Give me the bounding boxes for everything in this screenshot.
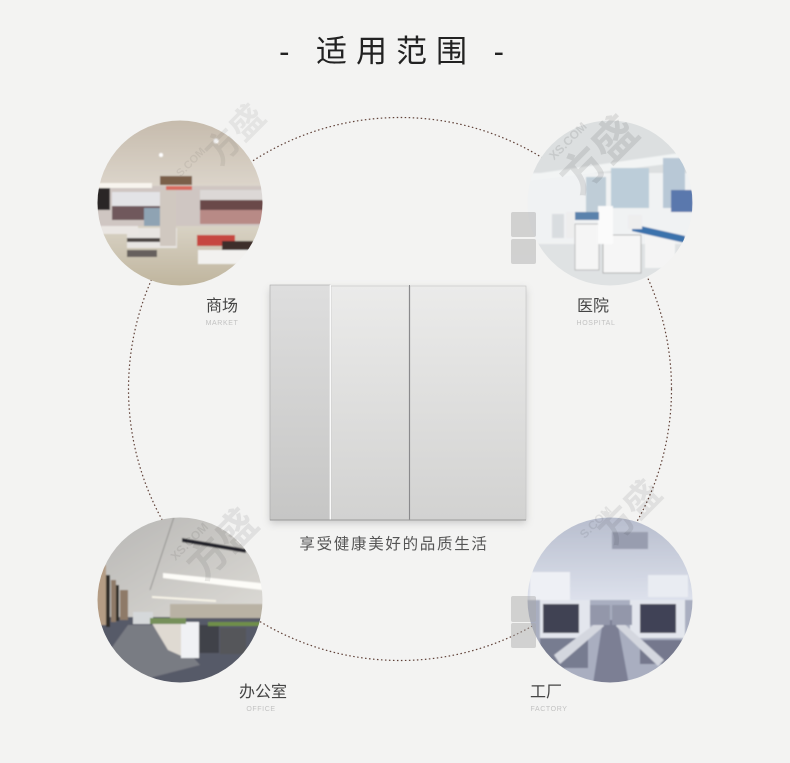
label: hospital: HOSPITAL (577, 320, 615, 327)
label: office (239, 683, 287, 713)
label: factory (530, 684, 568, 713)
label: market (206, 297, 239, 327)
watermark: bottom left: XS.COM (168, 520, 211, 563)
label: market: 商场 (206, 297, 238, 315)
watermark: bottom right: 方盛 (590, 472, 670, 552)
title: - 适用范围 - (279, 34, 513, 69)
watermark logo: right lower (511, 596, 536, 648)
caption: 享受健康美好的品质生活 (299, 535, 489, 553)
label: office: OFFICE (246, 706, 276, 713)
watermark: top right: XS.COM (546, 119, 590, 163)
watermark: top left: S.COM (174, 146, 208, 180)
watermark: bottom right: S.COM (577, 504, 615, 541)
photo: factory (528, 518, 692, 682)
label: factory: 工厂 (530, 684, 562, 701)
photo: office (98, 518, 262, 682)
panel: product, three ceiling panels (270, 285, 526, 523)
watermark: top right: 方盛 (551, 107, 648, 204)
watermark: bottom left: 方盛 (179, 501, 267, 589)
label: factory: FACTORY (530, 706, 568, 713)
watermark: top left (173, 98, 273, 197)
label: hospital: 医院 (577, 297, 609, 315)
label: market: MARKET (206, 320, 239, 327)
label: office: 办公室 (239, 683, 287, 701)
photo: hospital (534, 120, 692, 286)
watermark: top left: 方盛 (198, 98, 273, 172)
label: hospital (577, 297, 615, 327)
dashed ring connecting the four scenes (128, 118, 672, 660)
watermark logo: right upper (511, 212, 536, 264)
photo: market (98, 120, 262, 286)
